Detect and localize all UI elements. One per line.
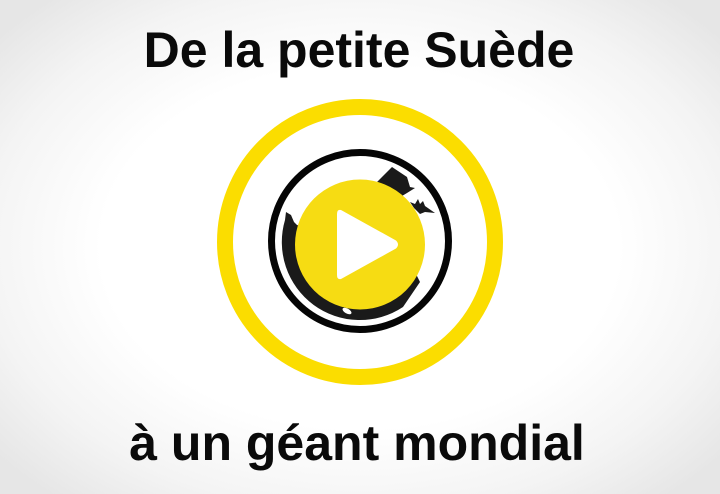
- title: bottom line: à un géant mondial: [129, 415, 585, 471]
- icon: globe: [272, 152, 448, 330]
- yellow outer ring: [225, 107, 495, 377]
- yellow play disc: [295, 180, 425, 310]
- title: top line: De la petite Suède: [144, 22, 574, 78]
- icon: play triangle: [337, 210, 398, 279]
